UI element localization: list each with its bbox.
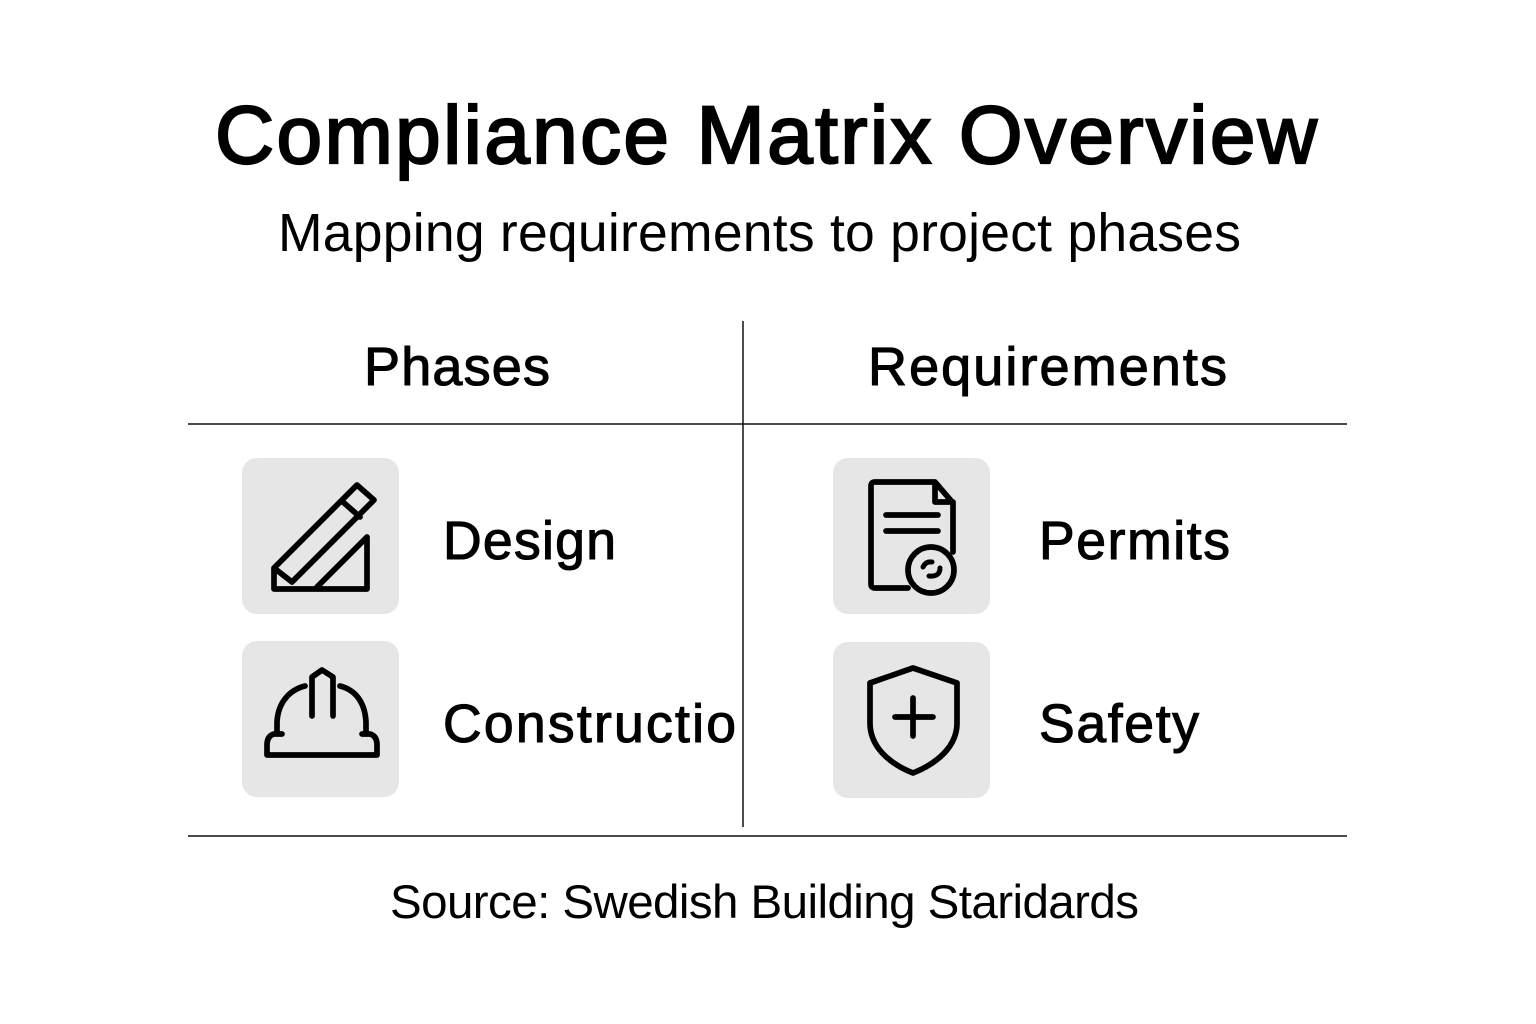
title: Compliance Matrix Overview <box>215 90 1318 181</box>
icon: safety shield <box>833 642 990 798</box>
subtitle: Mapping requirements to project phases <box>278 204 1241 263</box>
source note: Source: Swedish Building Staridards <box>390 876 1139 929</box>
label: design: Design <box>443 512 616 571</box>
column heading: requirements: Requirements <box>868 337 1227 397</box>
label: construction: Constructio <box>443 695 736 754</box>
icon: design pencil and set square <box>242 458 399 614</box>
icon: permits document <box>833 458 990 614</box>
label: permits: Permits <box>1039 512 1230 571</box>
icon: construction helmet <box>242 641 399 797</box>
matrix grid lines <box>188 321 1347 836</box>
label: safety: Safety <box>1039 695 1199 754</box>
column heading: phases: Phases <box>364 337 550 397</box>
